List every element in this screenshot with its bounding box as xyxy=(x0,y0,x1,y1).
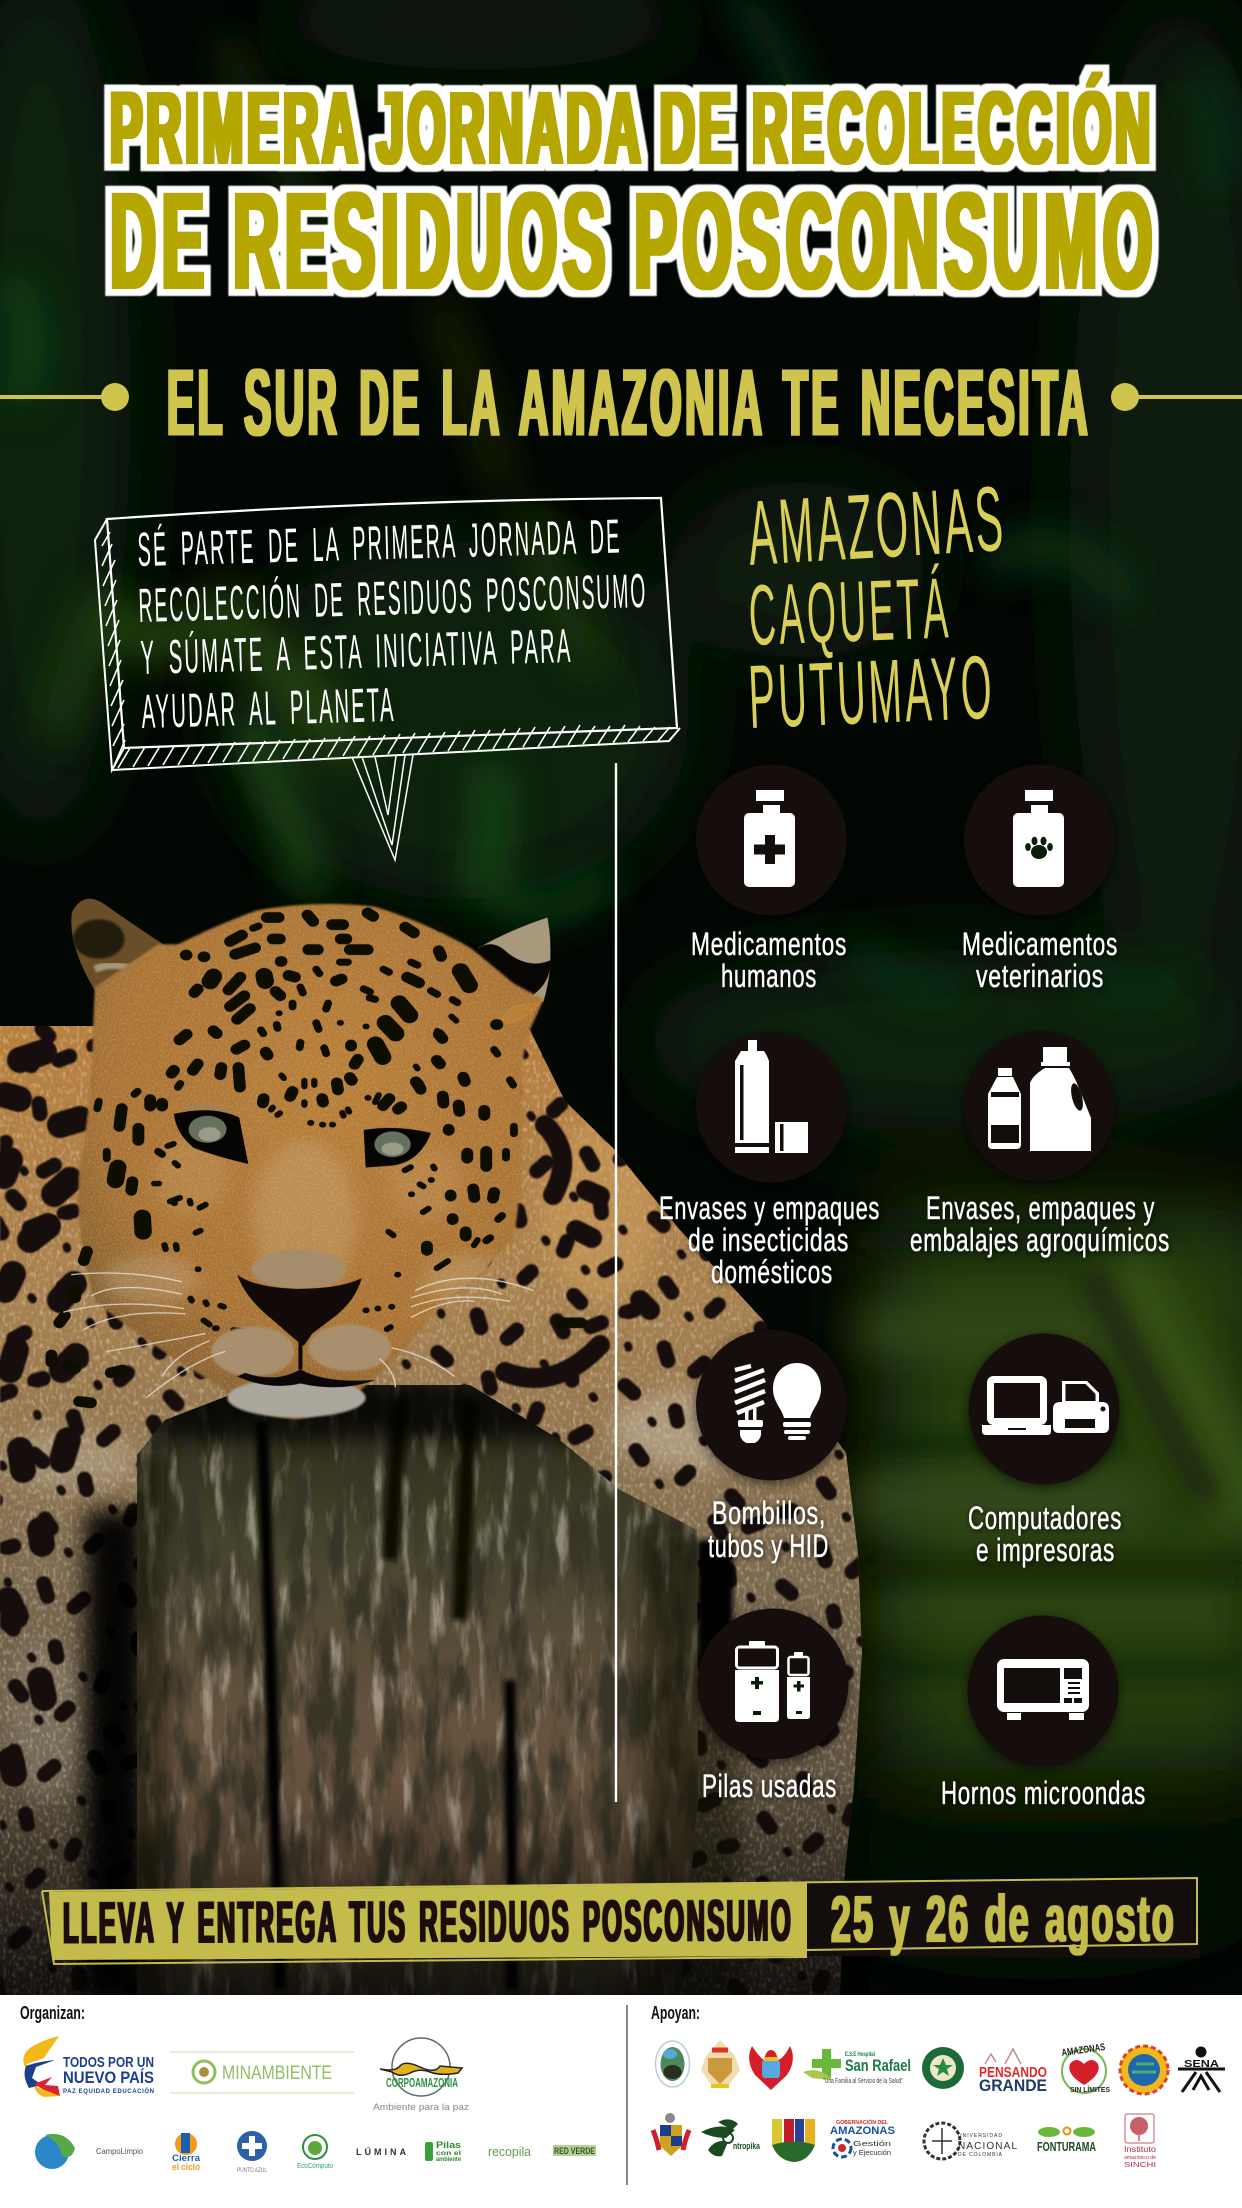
supporting logos, second row xyxy=(653,2113,1157,2169)
face spots xyxy=(51,913,581,1403)
logo: minambiente xyxy=(170,2052,354,2093)
logo: campo limpio: CampoLimpio xyxy=(96,2147,144,2156)
logo: pensando en grande xyxy=(979,2049,1047,2095)
speech bubble: Y SÚMATE A ESTA INICIATIVA PARA xyxy=(140,619,573,685)
icon: spray can and box xyxy=(735,1040,808,1153)
logo: red verde: RED VERDE xyxy=(554,2146,595,2156)
bubble text xyxy=(137,511,648,739)
logo: todos por un nuevo pais: NUEVO PAÍS xyxy=(63,2068,154,2087)
logo: pilas con el ambiente: con el xyxy=(436,2151,461,2157)
speech bubble xyxy=(95,498,680,860)
item: insecticidas: de insecticidas xyxy=(688,1222,849,1258)
leopard photo xyxy=(0,899,900,2010)
logo: sinchi xyxy=(1124,2114,1157,2169)
item: bombillos: Bombillos, xyxy=(712,1495,826,1531)
logo: universidad nacional: DE COLOMBIA xyxy=(958,2152,1003,2158)
logo: san rafael xyxy=(803,2049,911,2085)
departments list xyxy=(745,468,1009,748)
item: medicamentos veterinarios: Medicamentos xyxy=(962,926,1118,962)
muzzle and chin xyxy=(211,1250,391,1417)
icon: bottle and jug xyxy=(988,1047,1091,1151)
logo: sena: SENA xyxy=(1184,2059,1219,2070)
logo: ecocomputo: EcoCómputo xyxy=(297,2163,333,2170)
left ear xyxy=(71,899,174,1001)
logo: minambiente: MINAMBIENTE xyxy=(222,2063,332,2084)
banner left xyxy=(49,1883,807,1960)
item: agroquimicos xyxy=(910,1030,1170,1258)
logo: pensando en grande: GRANDE xyxy=(979,2076,1047,2095)
logo: amazonas sin limites: AMAZONAS xyxy=(1061,2042,1106,2059)
logo: cierra el ciclo: el ciclo xyxy=(172,2162,200,2172)
item: medicamentos veterinarios: veterinarios xyxy=(976,958,1104,994)
logo: sinchi: SINCHI xyxy=(1124,2162,1156,2169)
logo: pilas con el ambiente: ambiente xyxy=(436,2157,462,2163)
item: computadores xyxy=(968,1334,1122,1568)
logo: corpoamazonia: Ambiente para la paz xyxy=(373,2102,470,2112)
logo: cierra el ciclo xyxy=(172,2133,201,2172)
tree stump xyxy=(137,1385,698,1995)
item: medicamentos veterinarios xyxy=(962,764,1118,994)
icon: light bulbs xyxy=(735,1363,821,1443)
departments list: CAQUETÁ xyxy=(747,560,953,664)
logo: water circle xyxy=(35,2134,75,2169)
right eye xyxy=(364,1128,431,1167)
logo: fonturama xyxy=(1037,2127,1096,2154)
icon: laptop and printer xyxy=(982,1380,1109,1435)
title xyxy=(110,71,1158,318)
logo: pilas con el ambiente xyxy=(425,2140,462,2163)
logo: recopila: recopila xyxy=(488,2144,532,2159)
icon: batteries xyxy=(735,1641,810,1722)
logo: punto azul xyxy=(237,2131,268,2174)
left eye xyxy=(174,1107,248,1164)
item: bombillos: tubos y HID xyxy=(708,1528,829,1564)
icon: bottle with cross xyxy=(744,790,795,887)
logo: san rafael: E.S.E Hospital xyxy=(845,2052,875,2058)
right ear xyxy=(474,917,551,1001)
logo: gobernacion amazonas xyxy=(830,2118,895,2157)
logo: aguila roja xyxy=(749,2046,793,2090)
footer panel xyxy=(0,1995,1242,2208)
organizan heading: Organizan: xyxy=(20,2003,85,2023)
vertical divider xyxy=(615,763,617,1802)
logo: universidad nacional xyxy=(924,2123,1017,2159)
logo: lumina: LÚMINA xyxy=(356,2146,406,2157)
whiskers xyxy=(63,1273,534,1398)
logo: sinchi: amazónico de xyxy=(1124,2155,1156,2161)
logo: san rafael: San Rafael xyxy=(845,2056,911,2075)
logo: gobernacion amazonas: AMAZONAS xyxy=(830,2125,895,2137)
sketch frame xyxy=(95,498,680,770)
leopard head xyxy=(51,899,581,1423)
logo: gobernacion amazonas: Gestión xyxy=(853,2141,891,2148)
logo: entropika xyxy=(701,2119,761,2156)
logo: universidad nacional: NACIONAL xyxy=(958,2141,1017,2152)
icon: microwave xyxy=(997,1659,1089,1720)
logo: amazonas sin limites xyxy=(1061,2042,1110,2094)
logo: escudo xyxy=(701,2040,740,2086)
item: medicamentos humanos xyxy=(691,764,847,994)
supporting logos, first row xyxy=(656,2040,1225,2095)
logo: punto azul: PUNTO AZUL xyxy=(237,2168,268,2174)
logo: gobernacion amazonas: GOBERNACIÓN DEL xyxy=(836,2118,888,2126)
logo: pensando en grande: PENSANDO xyxy=(979,2064,1047,2081)
item: computadores: Computadores xyxy=(968,1500,1122,1536)
logo: escudo departamento xyxy=(653,2113,689,2156)
item: pilas: Pilas usadas xyxy=(702,1768,837,1804)
item: hornos: Hornos microondas xyxy=(941,1775,1146,1811)
logo: gobernacion amazonas: y Ejecución xyxy=(853,2150,891,2157)
leopard body xyxy=(0,1000,900,2000)
bubble pointer xyxy=(352,755,413,860)
logo: policia xyxy=(922,2047,964,2089)
logo: parques xyxy=(656,2041,690,2087)
bubble text: AYUDAR AL PLANETA xyxy=(141,679,396,739)
small logo row xyxy=(35,2131,596,2174)
apoyan heading: Apoyan: xyxy=(651,2003,700,2023)
logo: fonturama: FONTURAMA xyxy=(1037,2139,1096,2154)
item: pilas xyxy=(698,1608,848,1804)
item: computadores: e impresoras xyxy=(976,1532,1115,1568)
logo: pilas con el ambiente: Pilas xyxy=(436,2140,461,2150)
item: insecticidas: domésticos xyxy=(711,1254,833,1290)
logo: sol xyxy=(1120,2046,1168,2094)
logo: todos por un nuevo pais: TODOS POR UN xyxy=(63,2054,154,2071)
logo: corpoamazonia xyxy=(373,2038,470,2112)
item: medicamentos humanos: humanos xyxy=(721,958,817,994)
logo: corpoamazonia: CORPOAMAZONIA xyxy=(386,2075,458,2090)
item: medicamentos humanos: Medicamentos xyxy=(691,926,847,962)
banner right xyxy=(807,1879,1200,1958)
logo: entropika: ntropika xyxy=(733,2141,761,2151)
item: insecticidas: Envases y empaques xyxy=(659,1190,880,1226)
nose xyxy=(237,1275,362,1346)
icon: bottle with paw xyxy=(1013,790,1064,887)
logo: todos por un nuevo pais xyxy=(23,2036,154,2097)
logo: sinchi: Instituto xyxy=(1124,2145,1157,2154)
logo: uspl xyxy=(772,2119,815,2162)
logo: universidad nacional: UNIVERSIDAD xyxy=(958,2133,1002,2139)
logo: ecocomputo xyxy=(297,2135,333,2170)
item: insecticidas xyxy=(659,1032,880,1290)
item: bombillos xyxy=(696,1330,847,1564)
head shape xyxy=(78,904,544,1419)
logo: amazonas sin limites: SIN LÍMITES xyxy=(1070,2085,1110,2094)
logo: todos por un nuevo pais: PAZ EQUIDAD EDUCACIÓN xyxy=(63,2087,154,2095)
logo: sena xyxy=(1178,2046,1225,2092)
logo: san rafael: "Una Familia al Servicio de la Salud" xyxy=(823,2078,903,2085)
logo: cierra el ciclo: Cierra xyxy=(172,2153,201,2163)
item: hornos xyxy=(941,1616,1146,1811)
